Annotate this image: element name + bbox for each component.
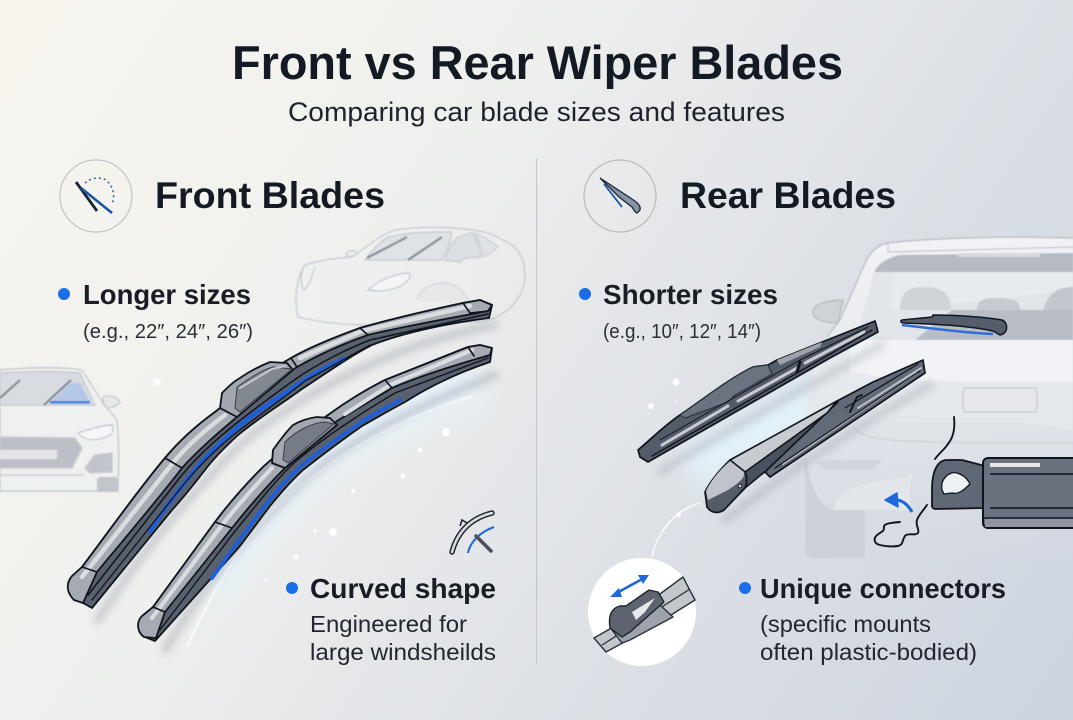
center connector — [220, 362, 293, 417]
text block: longer sizes — [58, 279, 253, 343]
text block: unique connectors: (specific mounts — [760, 611, 931, 637]
shadow — [725, 385, 930, 520]
icon: front wiper in circle — [60, 160, 132, 232]
mount — [612, 605, 673, 643]
shadow — [660, 345, 882, 472]
front blade 1 — [68, 300, 494, 620]
cover highlight — [152, 350, 472, 618]
rubber and spine — [82, 300, 492, 608]
head — [705, 460, 747, 512]
icon: blue arrow — [885, 493, 912, 512]
rubber and spine — [145, 345, 492, 641]
bumper recess — [855, 428, 1073, 443]
icon: curved shape gauge — [452, 513, 494, 553]
squiggle lines — [875, 417, 954, 546]
blue strip — [150, 359, 343, 531]
blade rail — [594, 577, 695, 652]
shadow — [165, 375, 495, 650]
text block: curved shape: Engineered for — [310, 611, 467, 637]
silver cover — [68, 300, 492, 603]
sparkles — [154, 378, 912, 582]
trunk — [850, 340, 1073, 382]
front blade 2 — [138, 345, 495, 650]
cover joints — [82, 303, 488, 572]
center connector — [272, 417, 337, 468]
clip hook — [932, 460, 985, 509]
arm — [745, 402, 838, 488]
cover highlight — [82, 306, 470, 577]
silver cover — [138, 345, 492, 638]
glow: front blades — [215, 385, 480, 590]
rear blade 2 and arm — [705, 360, 930, 520]
highlights — [662, 332, 864, 445]
glow: rear blades — [690, 365, 880, 470]
rear connector device — [932, 458, 1073, 528]
blade — [765, 360, 925, 477]
heading: front blades: Front Blades — [155, 175, 385, 216]
text block: unique connectors: often plastic-bodied) — [760, 639, 977, 665]
body — [638, 321, 878, 462]
text block: longer sizes: Longer sizes — [83, 279, 251, 310]
panel: rear car illustration — [805, 237, 1073, 558]
mirror — [813, 300, 843, 323]
lower bumper and wheel — [805, 450, 865, 558]
cover — [680, 365, 772, 418]
panel: front blades car illustration, left — [0, 368, 120, 492]
text block: curved shape: Curved shape — [310, 573, 496, 604]
text block: shorter sizes — [579, 279, 778, 343]
subtitle: Comparing car blade sizes and features — [288, 97, 785, 127]
text block: shorter sizes: Shorter sizes — [603, 279, 778, 310]
light streak: front — [187, 396, 472, 647]
rear window — [856, 253, 1073, 340]
shadow — [98, 325, 494, 620]
panel: front blades car illustration, top — [296, 227, 525, 325]
heading: rear blades: Rear Blades — [680, 175, 896, 216]
blue strip — [212, 400, 400, 578]
icon: double arrow — [610, 575, 649, 597]
icon: rear wiper in circle — [584, 160, 656, 232]
mounted rear wiper — [901, 315, 1007, 335]
rubber lines — [160, 358, 488, 630]
licence plate — [963, 388, 1037, 412]
cover joints — [153, 347, 474, 612]
text block: longer sizes: (e.g., 22″, 24″, 26″) — [83, 321, 253, 343]
connector curve line — [652, 503, 700, 557]
rear blade 1 — [638, 321, 882, 472]
text block: unique connectors: Unique connectors — [760, 573, 1006, 604]
inset: connector close-up — [588, 558, 696, 666]
text block: shorter sizes: (e.g., 10″, 12″, 14″) — [603, 321, 761, 343]
text block: unique connectors — [739, 573, 1006, 665]
rubber lines — [88, 314, 488, 595]
body — [806, 237, 1073, 558]
text block: curved shape: large windsheilds — [310, 639, 496, 665]
text block: curved shape — [286, 573, 496, 665]
divider — [536, 158, 537, 665]
title: Front vs Rear Wiper Blades — [232, 36, 843, 89]
